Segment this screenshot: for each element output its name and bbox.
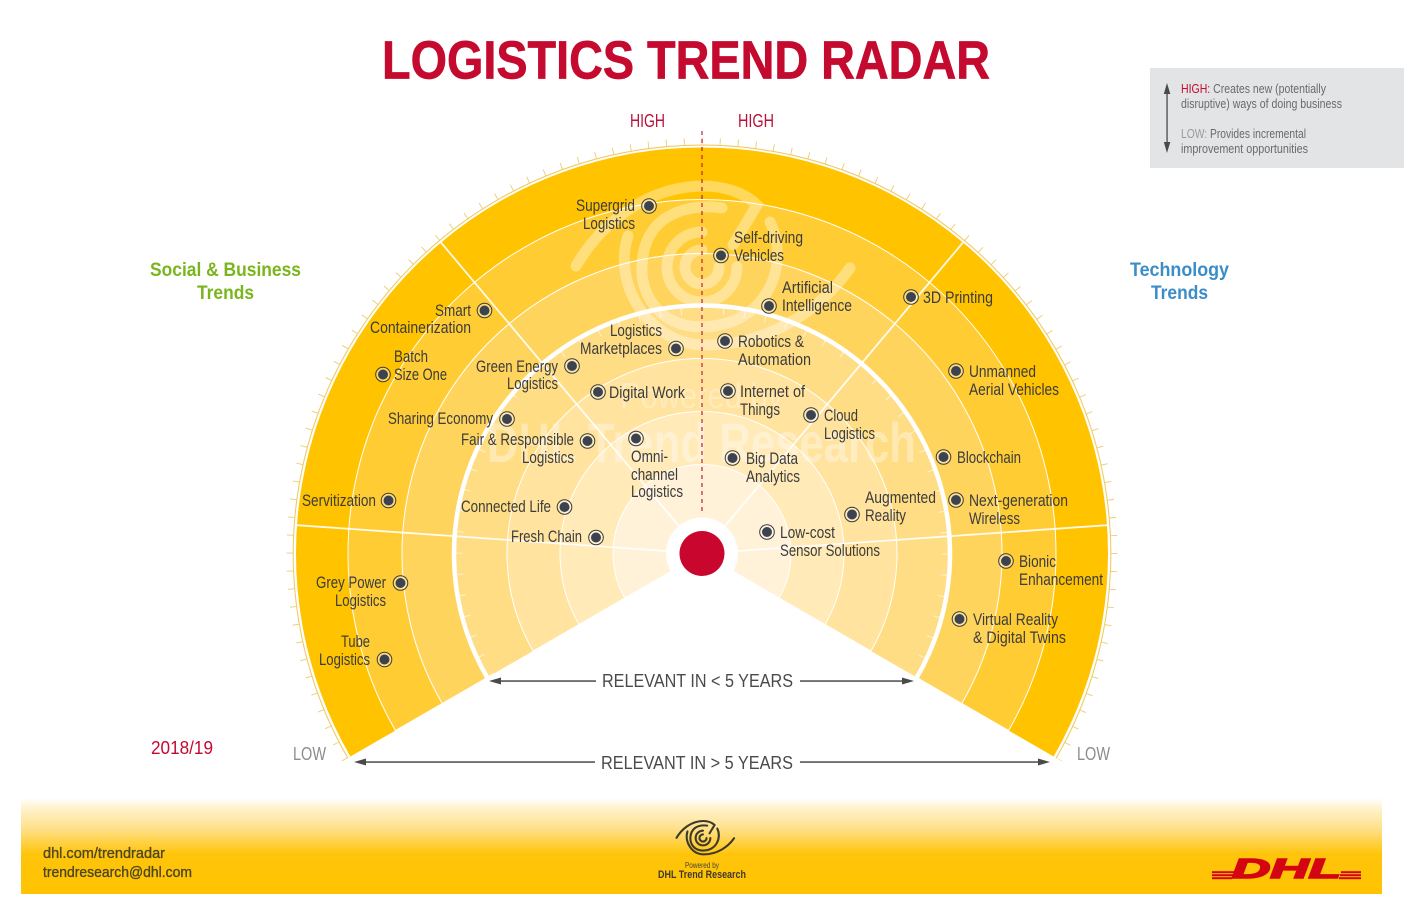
legend high text: HIGH: Creates new (potentially (1181, 81, 1326, 96)
ring 1 outermost (296, 147, 1108, 756)
watermark: powered by text: Powered by (620, 375, 783, 416)
trend: Smart Containerization: Smart (435, 301, 471, 320)
trend: Tube Logistics: Logistics (319, 650, 370, 669)
outer thin arc (293, 145, 1111, 758)
trend: Logistics Marketplaces (580, 321, 683, 358)
dhl trend research text: DHL Trend Research (658, 869, 746, 881)
heading: social and business trends: Social & Business (150, 259, 301, 281)
ring 2 (348, 200, 1056, 731)
trend: Smart Containerization (370, 301, 492, 337)
trend: Batch Size One: Size One (394, 365, 447, 384)
relevance label: over 5 years: RELEVANT IN > 5 YEARS (601, 752, 793, 773)
trend: Unmanned Aerial Vehicles: Aerial Vehicles (969, 380, 1059, 399)
legend high text line 2: disruptive) ways of doing business (1181, 96, 1342, 111)
footer url: dhl.com/trendradar (43, 845, 165, 862)
trend: 3D Printing (904, 288, 993, 307)
trend: Big Data Analytics: Analytics (746, 467, 800, 486)
heading: technology trends: Technology (1130, 259, 1229, 281)
trend: Smart Containerization: Containerization (370, 318, 471, 337)
ring 7 (613, 465, 791, 598)
sector dividers (297, 242, 1107, 554)
trend: Cloud Logistics (804, 406, 875, 443)
trend: Fair and Responsible Logistics: Logistics (522, 448, 574, 467)
trend: Blockchain (936, 448, 1021, 467)
heading: social and business trends (150, 259, 301, 304)
trend: Next-generation Wireless: Wireless (969, 509, 1020, 528)
trend: Cloud Logistics: Logistics (824, 424, 875, 443)
trend: Logistics Marketplaces: Marketplaces (580, 339, 662, 358)
trend: Internet of Things: Things (740, 400, 780, 419)
arrow right (800, 758, 1050, 766)
trend: Bionic Enhancement (999, 552, 1103, 589)
trend: Logistics Marketplaces: Logistics (610, 321, 662, 340)
legend panel (1150, 68, 1404, 168)
trend: Omni-channel Logistics: channel (631, 465, 678, 484)
ring 3 (402, 253, 1002, 703)
year label: 2018/19 (151, 738, 213, 758)
low label right: LOW (1077, 744, 1110, 764)
heading: technology trends (1130, 259, 1229, 304)
trend: Augmented Reality: Reality (865, 506, 906, 525)
ring 4 (454, 306, 950, 678)
trend: Supergrid Logistics: Supergrid (576, 196, 635, 215)
legend arrow (1164, 83, 1170, 153)
trend: Fair and Responsible Logistics: Fair & Responsible (461, 430, 574, 449)
trend: Low-cost Sensor Solutions (760, 523, 880, 560)
ring 6 (560, 412, 844, 624)
trend: Grey Power Logistics (316, 573, 408, 610)
watermark: radar eye logo (576, 186, 850, 345)
trend: Low-cost Sensor Solutions: Sensor Solutions (780, 541, 880, 560)
trend: Batch Size One (376, 347, 447, 384)
trend: Green Energy Logistics: Green Energy (476, 357, 558, 376)
footer email: trendresearch@dhl.com (43, 864, 192, 881)
heading: technology trends: Trends (1151, 282, 1208, 304)
trend: Blockchain: Blockchain (957, 448, 1021, 467)
trend: Virtual Reality and Digital Twins: Virtual Reality (973, 610, 1058, 629)
trend: Tube Logistics: Tube (341, 632, 370, 651)
trend: Omni-channel Logistics (629, 431, 683, 501)
trend: Fresh Chain: Fresh Chain (511, 527, 582, 546)
trend: Connected Life: Connected Life (461, 497, 551, 516)
trend: Big Data Analytics: Big Data (746, 449, 798, 468)
trend: Internet of Things (721, 382, 805, 419)
trend: Unmanned Aerial Vehicles: Unmanned (969, 362, 1036, 381)
radar fan (290, 131, 1114, 760)
trend: Green Energy Logistics: Logistics (507, 374, 558, 393)
trend: Servitization: Servitization (302, 491, 376, 510)
trend: Big Data Analytics (725, 449, 800, 486)
footer eye logo (677, 821, 734, 854)
high label left: HIGH (630, 111, 665, 131)
trend: Robotics and Automation: Robotics & (738, 332, 805, 351)
legend low text: LOW: Provides incremental (1181, 126, 1306, 141)
arrow left (489, 678, 596, 684)
thick white 5-year ring (454, 306, 950, 678)
arrow left (354, 758, 595, 766)
relevance label: under 5 years: RELEVANT IN < 5 YEARS (602, 670, 793, 691)
trend: Augmented Reality: Augmented (865, 488, 936, 507)
legend low text line 2: improvement opportunities (1181, 141, 1308, 156)
powered by text: Powered by (685, 860, 720, 870)
trend: Virtual Reality and Digital Twins: & Digital Twins (973, 628, 1066, 647)
heading: social and business trends: Trends (197, 282, 254, 304)
trend: Supergrid Logistics: Logistics (583, 214, 635, 233)
trend: Omni-channel Logistics: Logistics (631, 482, 683, 501)
trend: Self-driving Vehicles: Vehicles (734, 246, 784, 265)
inner tick marks (458, 310, 946, 675)
trend: Grey Power Logistics: Logistics (335, 591, 386, 610)
trend: Next-generation Wireless: Next-generation (969, 491, 1068, 510)
relevance label: over 5 years (354, 752, 1050, 773)
trend: Self-driving Vehicles: Self-driving (734, 228, 803, 247)
trend: Artificial Intelligence: Intelligence (782, 296, 852, 315)
outer tick marks (290, 141, 1114, 760)
trend: Robotics and Automation: Automation (738, 350, 811, 369)
trend: Low-cost Sensor Solutions: Low-cost (780, 523, 835, 542)
relevance label: under 5 years (489, 670, 914, 691)
center white hole (666, 518, 738, 590)
arrow right (800, 678, 914, 684)
trend: Digital Work (591, 383, 685, 402)
center red circle (680, 531, 724, 576)
trend: Next-generation Wireless (949, 491, 1068, 528)
trend: Artificial Intelligence (762, 278, 852, 315)
trend: Augmented Reality (845, 488, 936, 525)
ring 5 (507, 359, 897, 651)
trend: Supergrid Logistics (576, 196, 656, 233)
trend: Robotics and Automation (718, 332, 811, 369)
trend: Sharing Economy: Sharing Economy (388, 409, 493, 428)
trend: Unmanned Aerial Vehicles (949, 362, 1059, 399)
trend: Cloud Logistics: Cloud (824, 406, 858, 425)
trend: Virtual Reality and Digital Twins (952, 610, 1066, 647)
trend: Green Energy Logistics (476, 357, 579, 393)
footer band (21, 798, 1382, 894)
high label right: HIGH (738, 111, 774, 131)
trend: Omni-channel Logistics: Omni- (631, 447, 668, 466)
watermark: dhl trend research text: DHL Trend Research (487, 411, 916, 474)
trend: 3D Printing: 3D Printing (923, 288, 993, 307)
title: LOGISTICS TREND RADAR (382, 32, 990, 90)
trend: Digital Work: Digital Work (609, 383, 685, 402)
trend: Self-driving Vehicles (714, 228, 803, 265)
dashed high axis (701, 131, 703, 513)
low label left: LOW (293, 744, 326, 764)
trend: Bionic Enhancement: Enhancement (1019, 570, 1103, 589)
trend: Tube Logistics (319, 632, 392, 669)
trend: Artificial Intelligence: Artificial (782, 278, 833, 297)
trend: Fair and Responsible Logistics (461, 430, 595, 467)
trend: Bionic Enhancement: Bionic (1019, 552, 1056, 571)
trend: Grey Power Logistics: Grey Power (316, 573, 386, 592)
trend: Batch Size One: Batch (394, 347, 428, 366)
dhl logo: DHL (1232, 853, 1341, 884)
trend: Internet of Things: Internet of (740, 382, 805, 401)
